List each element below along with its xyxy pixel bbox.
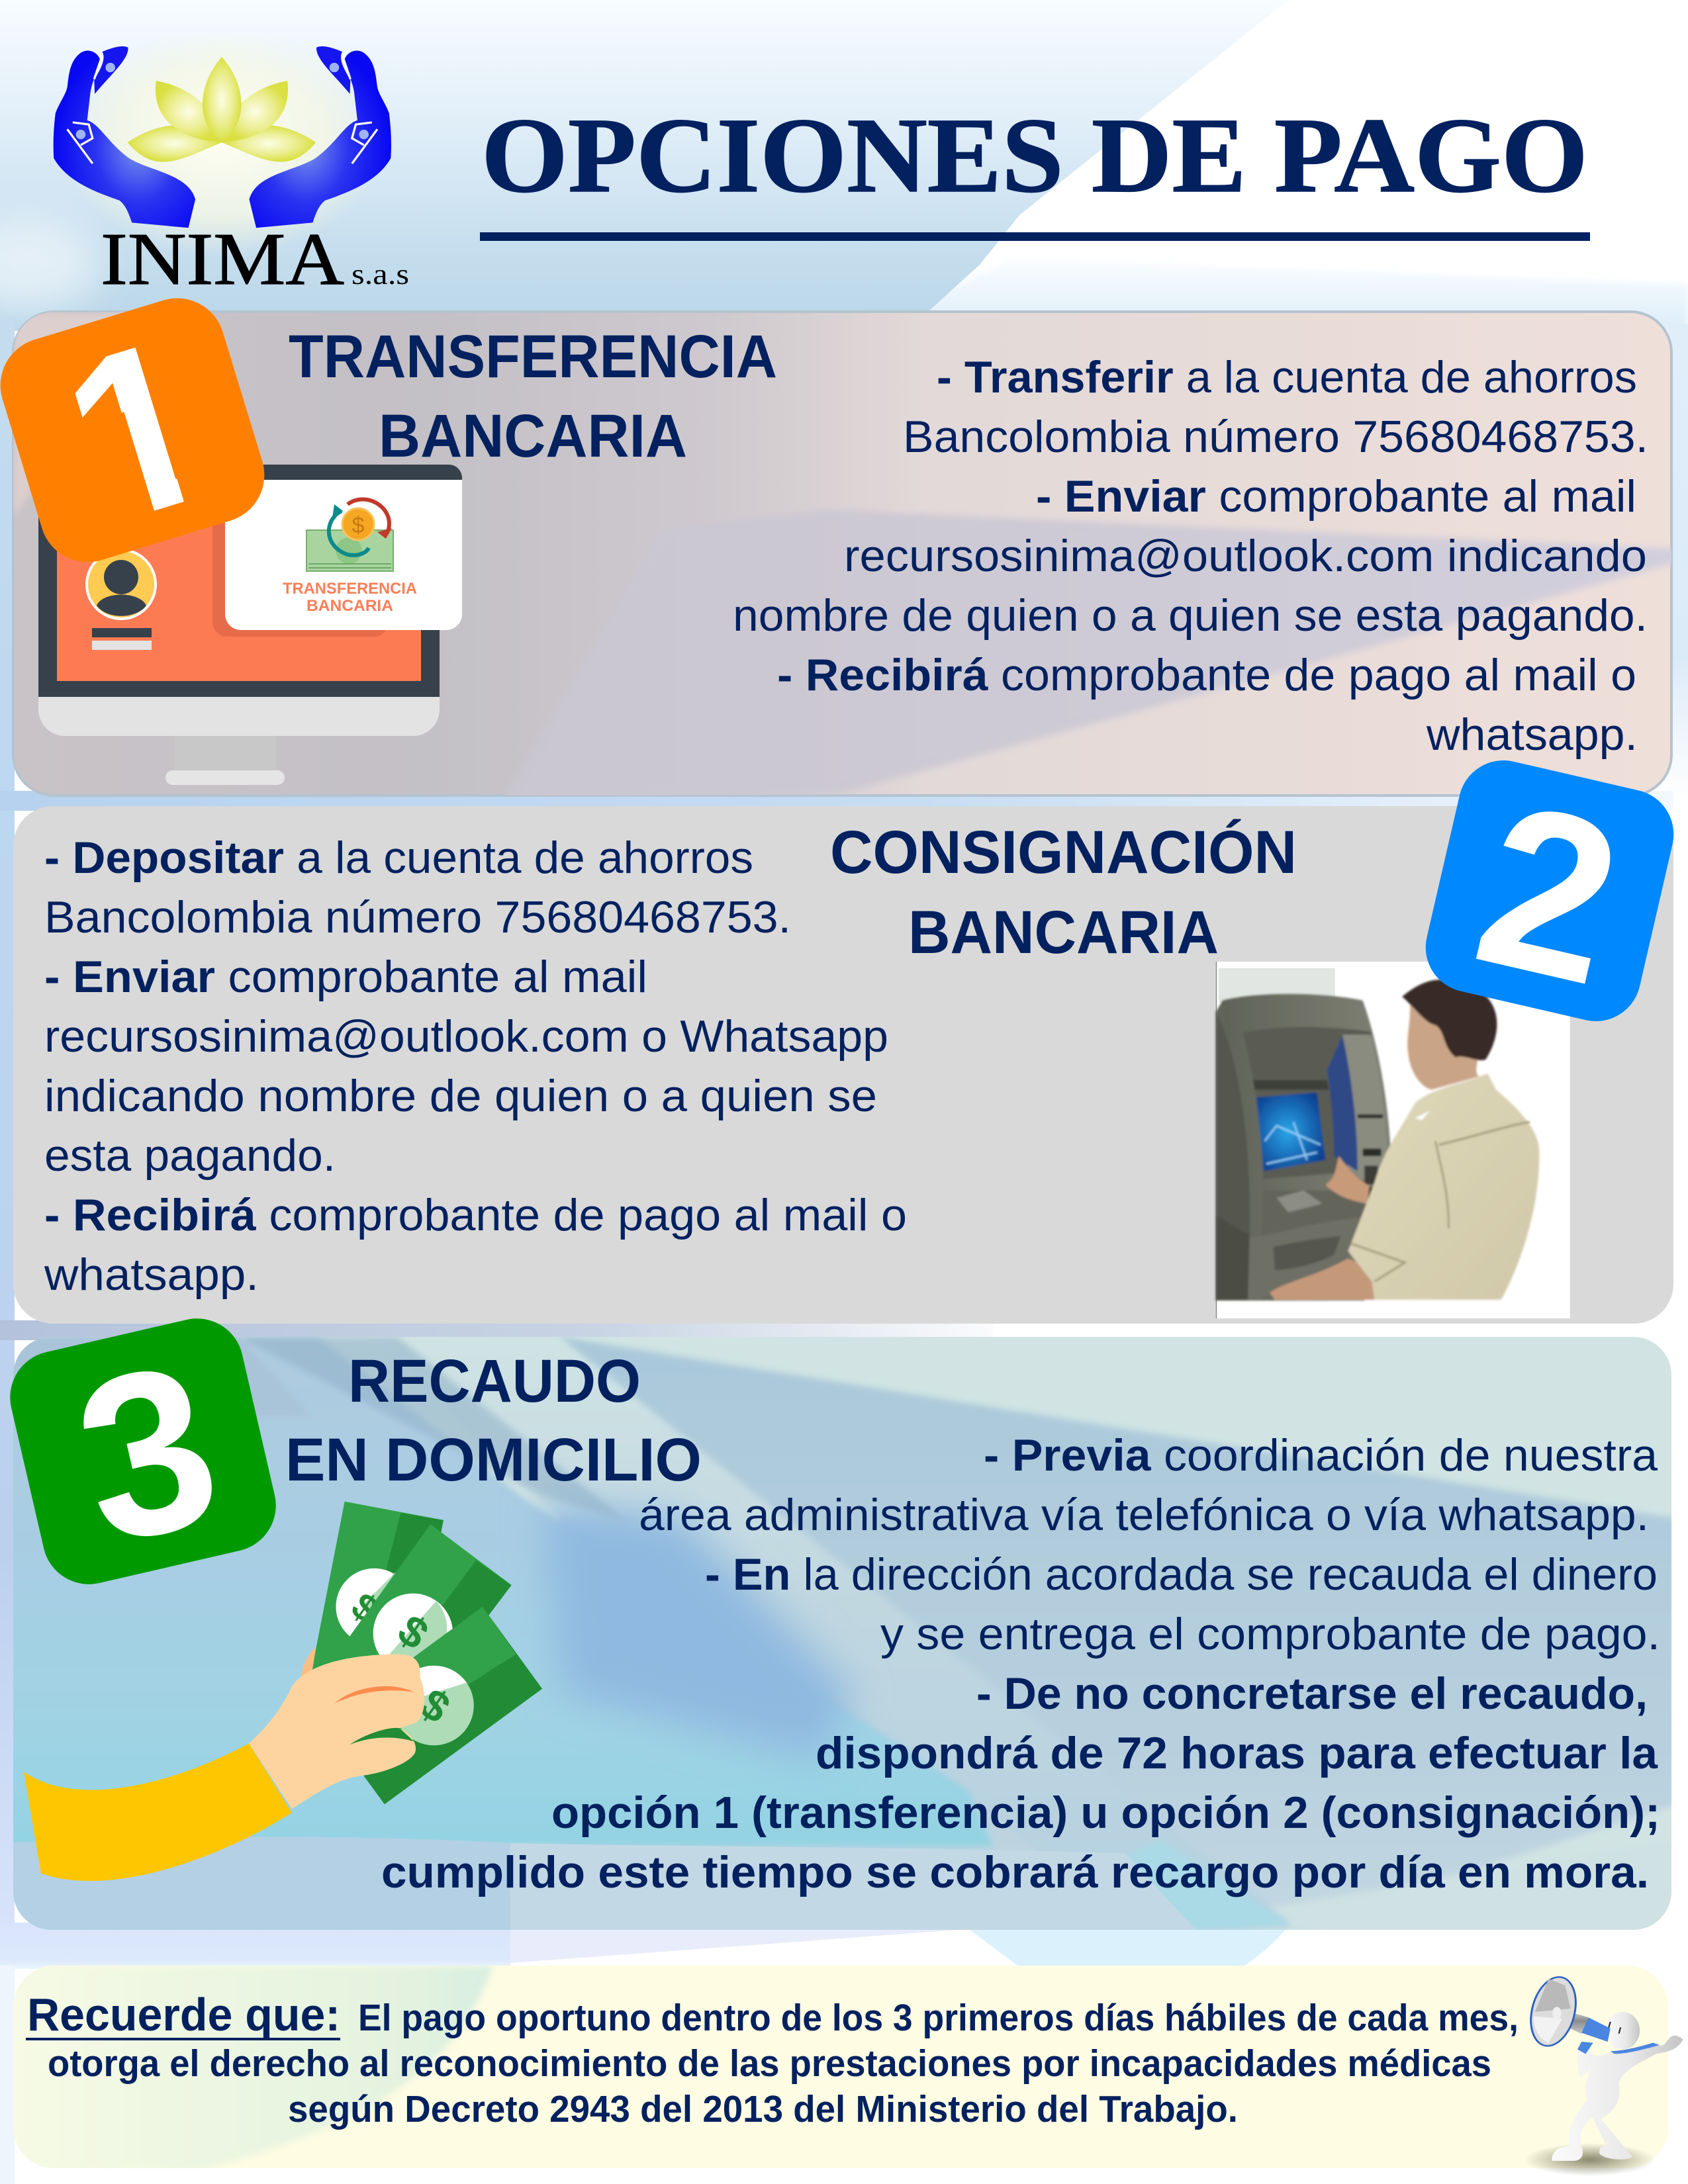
panel 1 heading [289, 323, 777, 470]
note text: Recuerde que: [27, 1989, 340, 2040]
note text: otorga el derecho al reconocimiento de las prestaciones por incapacidades médicas [48, 2042, 1491, 2085]
panel 1 body text: recursosinima@outlook.com indicando [844, 531, 1647, 581]
card label [283, 580, 417, 615]
illustration: hand holding banknotes [24, 1502, 542, 1881]
megaphone [1524, 1974, 1611, 2054]
figure body [1552, 2036, 1683, 2161]
head [1606, 2012, 1640, 2050]
panel 1 body text: - Recibirá comprobante de pago al mail o [777, 650, 1636, 700]
logo wordmark: INIMA [101, 218, 344, 300]
panel 1 body text: Bancolombia número 75680468753. [903, 412, 1648, 462]
logo left hand [54, 46, 195, 228]
panel 3 body text [381, 1430, 1660, 1897]
note text: según Decreto 2943 del 2013 del Ministerio del Trabajo. [288, 2088, 1238, 2130]
panel 1: transferencia bancaria [13, 312, 1688, 801]
panel 2 heading: BANCARIA [908, 899, 1219, 966]
panel 3 body text: dispondrá de 72 horas para efectuar la [816, 1728, 1658, 1778]
icon: banknote with coin and arrows [306, 499, 393, 571]
panel 3 body text: y se entrega el comprobante de pago. [880, 1609, 1660, 1659]
panel 1 body text [733, 352, 1648, 760]
note text: El pago oportuno dentro de los 3 primeros días hábiles de cada mes, [358, 1997, 1519, 2039]
banknote 2 [338, 1524, 512, 1709]
badge 3: 3 [56, 1313, 240, 1594]
panel 3 body text: - De no concretarse el recaudo, [976, 1668, 1648, 1719]
panel 2: consignacion bancaria [13, 806, 1673, 1324]
title: OPCIONES DE PAGO [481, 97, 1588, 215]
banknote 2: $ [389, 1605, 438, 1659]
panel 1 heading: TRANSFERENCIA [289, 323, 777, 390]
panel 3 body text: área administrativa vía telefónica o vía whatsapp. [639, 1490, 1649, 1540]
panel 3 body text: - En la dirección acordada se recauda el dinero [705, 1549, 1658, 1600]
panel 3 heading: EN DOMICILIO [285, 1426, 702, 1494]
badge 3 [0, 1302, 288, 1607]
note text [26, 1989, 1519, 2130]
banknote 3: $ [411, 1678, 459, 1733]
badge 2: 2 [1457, 753, 1641, 1034]
banknote 1 [312, 1502, 444, 1690]
tie [1611, 2043, 1660, 2054]
panel 3 body text: opción 1 (transferencia) u opción 2 (consignación); [551, 1788, 1660, 1838]
logo INIMA [54, 29, 409, 300]
avatar icon [87, 550, 156, 619]
logo glow and lotus [60, 29, 383, 256]
panel 1 body text: whatsapp. [1426, 709, 1638, 760]
panel 2 body text [44, 833, 907, 1300]
panel 2 body text: esta pagando. [44, 1130, 336, 1181]
badge 2 [1413, 743, 1685, 1044]
banknote 1: $ [344, 1584, 385, 1631]
panel 2 heading: CONSIGNACIÓN [830, 818, 1297, 886]
logo suffix: s.a.s [352, 258, 409, 291]
title underline [480, 232, 1590, 241]
panel 1 body text: - Enviar comprobante al mail [1036, 471, 1636, 522]
panel 1 body text: nombre de quien o a quien se esta pagando. [733, 590, 1648, 641]
panel 3 heading: RECAUDO [348, 1347, 641, 1415]
panel 2 heading [830, 818, 1297, 966]
sleeve [24, 1743, 292, 1881]
panel 2 body text: - Depositar a la cuenta de ahorros [44, 833, 753, 883]
hand [249, 1647, 424, 1809]
logo right hand [249, 46, 391, 228]
icon: banknote with coin and arrows: $ [352, 513, 365, 538]
panel 2 body text: - Recibirá comprobante de pago al mail o [44, 1190, 907, 1240]
panel 2 body text: Bancolombia número 75680468753. [44, 892, 791, 942]
panel 1 body text: - Transferir a la cuenta de ahorros [937, 352, 1637, 402]
photo: man at ATM [1216, 962, 1570, 1318]
panel 3 body text: cumplido este tiempo se cobrará recargo por día en mora. [381, 1847, 1649, 1897]
card label: TRANSFERENCIA [283, 580, 417, 598]
panel 3 heading [285, 1347, 702, 1494]
panel 3: recaudo en domicilio [0, 1337, 1688, 1933]
card label: BANCARIA [306, 597, 393, 615]
banknote 3 [325, 1607, 542, 1804]
badge 1: 1 [38, 287, 239, 576]
panel 1 heading: BANCARIA [379, 402, 687, 470]
illustration: computer with transfer card [38, 465, 462, 785]
panel 3 body text: - Previa coordinación de nuestra [984, 1430, 1658, 1480]
panel 2 body text: indicando nombre de quien o a quien se [44, 1071, 877, 1121]
panel 4: recuerde que note [13, 1966, 1668, 2171]
panel 2 body text: recursosinima@outlook.com o Whatsapp [44, 1011, 888, 1062]
panel 2 body text: whatsapp. [44, 1250, 259, 1300]
panel 2 body text: - Enviar comprobante al mail [44, 952, 647, 1002]
illustration: figure with megaphone [1524, 1974, 1683, 2176]
